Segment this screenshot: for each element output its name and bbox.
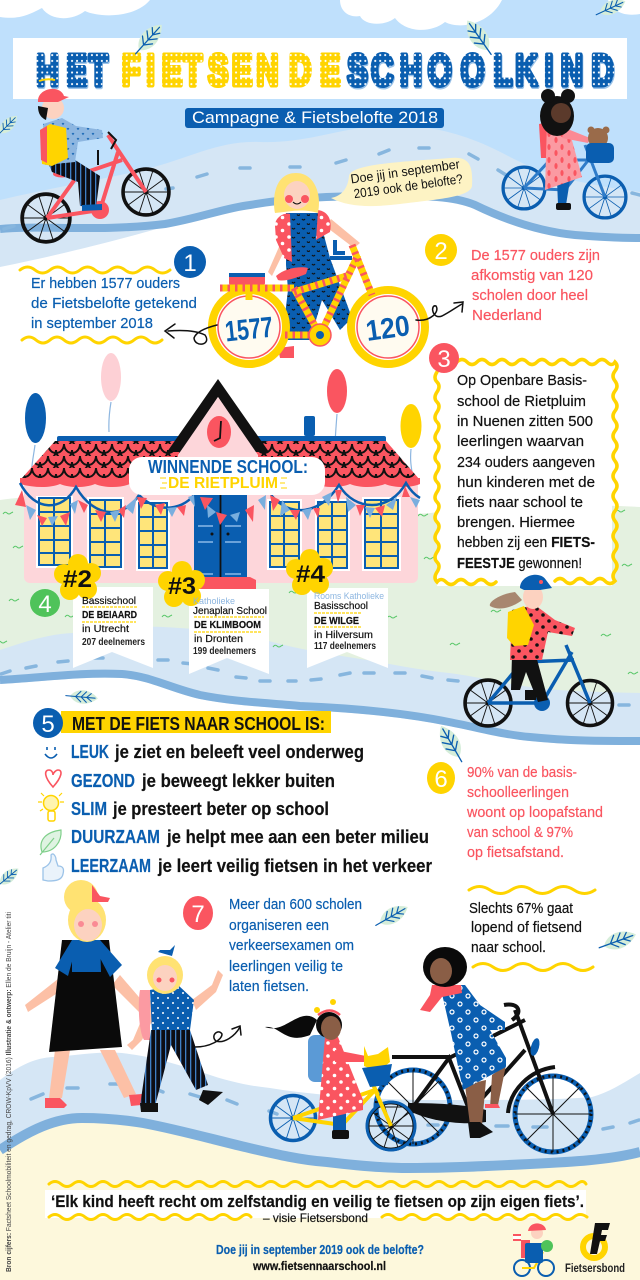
list row: slim: je presteert beter op school bbox=[112, 799, 329, 819]
ribbon: runner-up #4: Basisschool bbox=[314, 600, 368, 612]
ribbon: runner-up #2: DE BEIAARD bbox=[82, 609, 137, 621]
campaign logo: child on bike bbox=[513, 1223, 554, 1276]
step 3: winning school text box: Op Openbare Basis- bbox=[457, 372, 587, 389]
speech bubble bbox=[331, 156, 472, 206]
section 5: cycling to school is: 5 bbox=[41, 711, 55, 738]
step 2: schools: 2 bbox=[434, 238, 448, 265]
list row: leerzaam bbox=[43, 854, 432, 881]
illustration: girl with blue cap on blue bike bbox=[465, 575, 612, 726]
title banner: SCHOOLKIND bbox=[347, 47, 614, 95]
callout: only 67 percent bbox=[469, 886, 595, 970]
ribbon: runner-up #2: Bassischool bbox=[82, 595, 136, 607]
step 6: walking and cycling distance: van school & 97% bbox=[467, 824, 573, 841]
ribbon: runner-up #3: 199 deelnemers bbox=[193, 646, 256, 657]
illustration: girl on blue bike with bear bbox=[503, 89, 626, 218]
step 1: parents signed bbox=[20, 246, 206, 343]
title banner: HET bbox=[36, 47, 108, 95]
step 6: walking and cycling distance: 90% van de basis- bbox=[467, 764, 577, 781]
ribbon: runner-up #4: in Hilversum bbox=[314, 629, 373, 641]
ribbon: runner-up #2 bbox=[54, 554, 153, 668]
quote: every child has the right: – visie Fietsersbond bbox=[263, 1211, 368, 1225]
ribbon: runner-up #4: DE WILGE bbox=[314, 615, 359, 627]
quote: every child has the right bbox=[45, 1182, 587, 1225]
list row: gezond: je beweegt lekker buiten bbox=[141, 771, 335, 791]
ribbon: runner-up #3: DE KLIMBOOM bbox=[194, 619, 261, 631]
section 5: cycling to school is: MET DE FIETS NAAR SCHOOL IS: bbox=[72, 714, 325, 734]
list row: leerzaam: je leert veilig fietsen in het verkeer bbox=[157, 856, 432, 876]
ribbon: runner-up #3: #3 bbox=[168, 573, 196, 600]
step 3: winning school text box: fiets naar school te bbox=[457, 494, 583, 511]
illustration: child walking bbox=[127, 945, 223, 1112]
step 3: winning school text box: 234 ouders aangeven bbox=[457, 454, 595, 471]
step 7: traffic exam: Meer dan 600 scholen bbox=[229, 896, 362, 913]
winning school sign: DE RIETPLUIM bbox=[168, 475, 278, 492]
step 1: parents signed: Er hebben 1577 ouders bbox=[31, 275, 180, 292]
step 3: winning school text box: brengen. Hiermee bbox=[457, 514, 575, 531]
arrow: wheel 120 to step 2 bbox=[416, 302, 463, 320]
footer call to action: www.fietsennaarschool.nl bbox=[252, 1259, 386, 1273]
credits: Bron cijfers: Factsheet Schoolmobiliteit en gedrag, CROW-KpVV (2016) Illustratie & ontwerp: Ellen de Bruijn - Atelier titi bbox=[6, 912, 13, 1272]
step 1: parents signed: 1 bbox=[183, 250, 197, 277]
illustration: boy on red bike bbox=[22, 79, 169, 242]
illustration: girl in overalls with yellow bike: 120 bbox=[364, 310, 412, 348]
decorative leaves bbox=[0, 0, 639, 955]
step 7: traffic exam: laten fietsen. bbox=[229, 978, 309, 995]
ribbon: runner-up #3: in Dronten bbox=[194, 633, 243, 645]
quote: every child has the right: ‘Elk kind heeft recht om zelfstandig en veilig te fietsen op zijn eigen fiets’. bbox=[51, 1192, 584, 1211]
winning school sign: WINNENDE SCHOOL: bbox=[148, 457, 308, 477]
list row: leuk: LEUK bbox=[71, 742, 109, 762]
callout: only 67 percent: Slechts 67% gaat bbox=[469, 900, 574, 917]
list row: leuk: je ziet en beleeft veel onderweg bbox=[114, 742, 364, 762]
callout: only 67 percent: naar school. bbox=[471, 939, 546, 956]
title banner: HET bbox=[37, 48, 108, 97]
balloons bbox=[25, 353, 422, 490]
subtitle pill: Campagne & Fietsbelofte 2018 bbox=[192, 108, 438, 127]
step 7: traffic exam bbox=[183, 896, 362, 995]
step 6: walking and cycling distance: woont op loopafstand bbox=[466, 804, 603, 821]
footer call to action: Doe jij in september 2019 ook de belofte? bbox=[216, 1243, 424, 1257]
list row: slim: SLIM bbox=[71, 799, 107, 819]
ribbon: runner-up #3 bbox=[158, 561, 269, 674]
step 6: walking and cycling distance: schoolleerlingen bbox=[467, 784, 569, 801]
speech bubble: Doe jij in september bbox=[350, 156, 461, 187]
step 2: schools: scholen door heel bbox=[472, 287, 588, 304]
ribbon: runner-up #4: #4 bbox=[296, 561, 326, 588]
ribbon: runner-up #3: Jenaplan School bbox=[193, 605, 267, 617]
green step number 4 bbox=[30, 589, 60, 618]
title banner: FIETSENDE bbox=[122, 47, 340, 95]
leaves over the title banner bbox=[129, 16, 498, 59]
step 3: winning school text box: hebben zij een FIETS- bbox=[457, 534, 595, 551]
list row: gezond: GEZOND bbox=[71, 771, 135, 791]
list row: slim bbox=[38, 793, 329, 821]
list row: leerzaam: LEERZAAM bbox=[71, 856, 151, 876]
arrow: pupils toward bikes bbox=[195, 1026, 241, 1047]
ribbon: runner-up #3: Katholieke bbox=[193, 596, 235, 607]
step 1: parents signed: in september 2018 bbox=[31, 315, 153, 332]
step 2: schools: Nederland bbox=[472, 307, 542, 324]
illustration: girl in overalls with yellow bike: 1577 bbox=[223, 312, 275, 348]
step 6: walking and cycling distance bbox=[427, 762, 603, 861]
step 7: traffic exam: leerlingen veilig te bbox=[229, 958, 343, 975]
step 2: schools: De 1577 ouders zijn bbox=[471, 247, 600, 264]
Fietsersbond logo: Fietsersbond bbox=[565, 1261, 625, 1275]
ribbon: runner-up #2: in Utrecht bbox=[82, 623, 129, 635]
step 3: winning school text box: FEESTJE gewonnen! bbox=[457, 555, 582, 572]
ribbon: runner-up #4: Rooms Katholieke bbox=[314, 591, 384, 602]
title banner bbox=[13, 38, 627, 99]
list row: duurzaam: DUURZAAM bbox=[71, 827, 160, 847]
footer call to action bbox=[216, 1243, 424, 1273]
illustration: mother on black bike bbox=[376, 947, 591, 1152]
illustration: mother walking bbox=[25, 880, 153, 1108]
step 2: schools bbox=[425, 234, 600, 324]
step 7: traffic exam: verkeersexamen om bbox=[229, 937, 354, 954]
step 6: walking and cycling distance: 6 bbox=[434, 766, 448, 793]
step 6: walking and cycling distance: op fietsafstand. bbox=[467, 844, 564, 861]
step 7: traffic exam: organiseren een bbox=[229, 917, 329, 934]
green step number 4: 4 bbox=[38, 591, 52, 618]
step 7: traffic exam: 7 bbox=[191, 901, 205, 928]
callout: only 67 percent: lopend of fietsend bbox=[471, 919, 582, 936]
Fietsersbond logo bbox=[565, 1223, 625, 1275]
step 3: winning school text box: school de Rietpluim bbox=[457, 393, 586, 410]
step 2: schools: afkomstig van 120 bbox=[471, 267, 593, 284]
speech bubble: 2019 ook de belofte? bbox=[353, 171, 464, 201]
illustration: girl in overalls with yellow bike bbox=[212, 173, 425, 364]
arrow: wheel 1577 to step 1 bbox=[165, 324, 217, 344]
step 3: winning school text box: leerlingen waarvan bbox=[457, 433, 584, 450]
step 3: winning school text box: in Nuenen zitten 500 bbox=[457, 413, 593, 430]
step 1: parents signed: de Fietsbelofte getekend bbox=[31, 295, 197, 312]
illustration: girl on yellow bike with cat bbox=[265, 999, 415, 1150]
ribbon: runner-up #2: 207 deelnemers bbox=[82, 637, 145, 648]
winning school building bbox=[15, 379, 420, 590]
step 3: winning school text box bbox=[429, 343, 617, 586]
ribbon: runner-up #4: 117 deelnemers bbox=[314, 641, 376, 652]
step 3: winning school text box: 3 bbox=[437, 346, 451, 373]
winning school sign bbox=[129, 457, 325, 495]
ribbon: runner-up #2: #2 bbox=[63, 566, 92, 593]
title banner: SCHOOLKIND bbox=[348, 48, 614, 97]
list row: duurzaam bbox=[40, 827, 429, 855]
list row: duurzaam: je helpt mee aan een beter milieu bbox=[166, 827, 429, 847]
list row: gezond bbox=[46, 770, 335, 791]
section 5: cycling to school is bbox=[33, 708, 432, 881]
ribbon: runner-up #4 bbox=[286, 549, 388, 668]
step 3: winning school text box: hun kinderen met de bbox=[457, 474, 595, 491]
